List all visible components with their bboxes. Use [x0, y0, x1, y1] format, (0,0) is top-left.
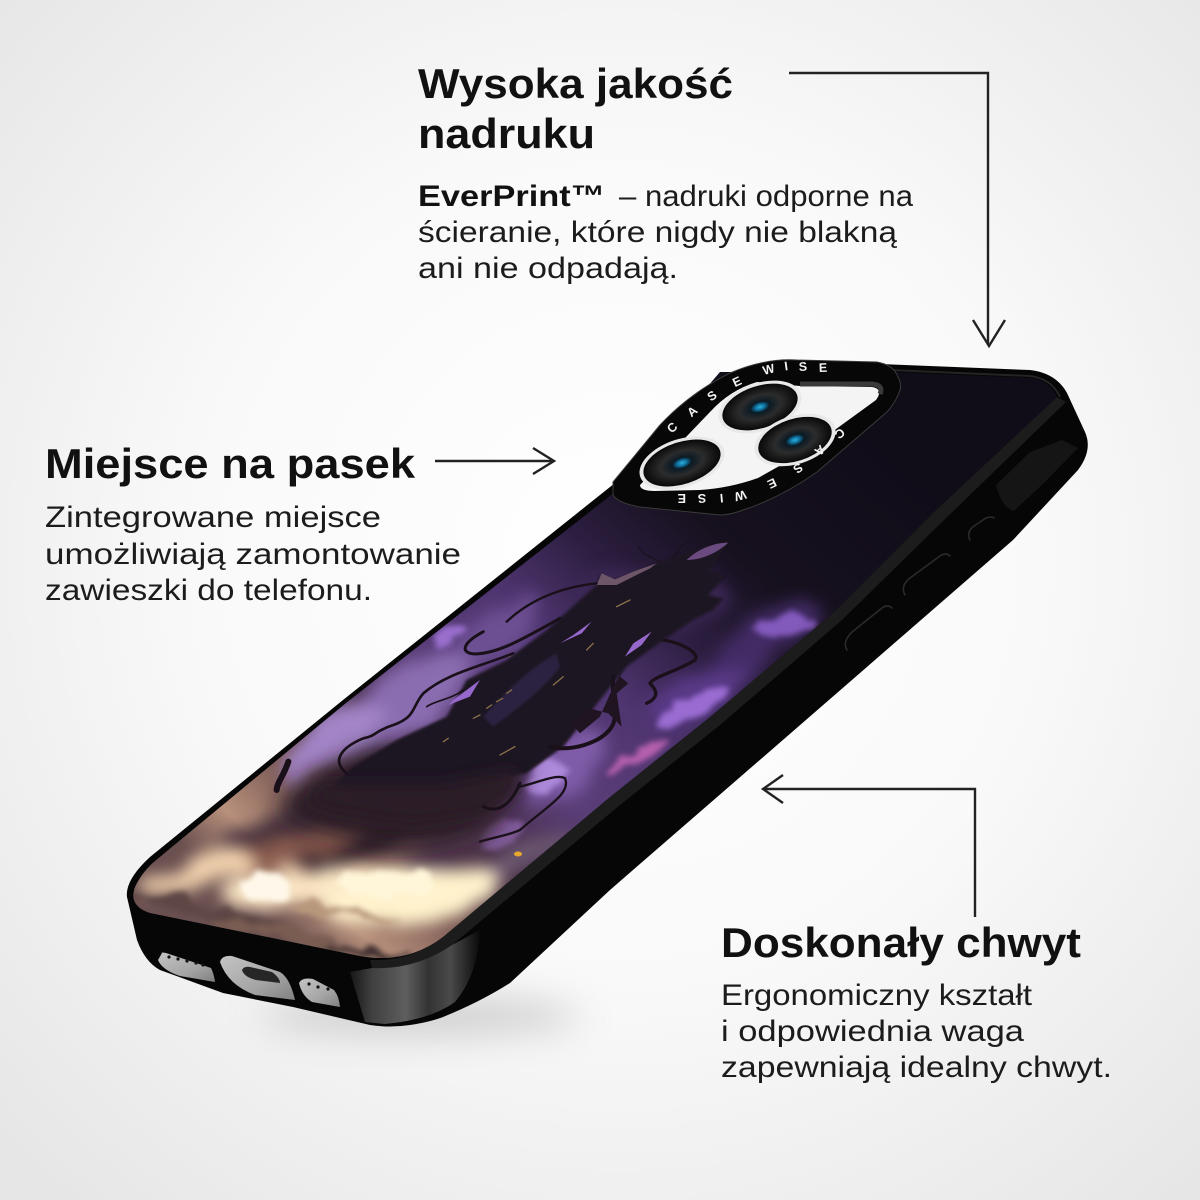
arrow: strap slot	[435, 448, 554, 474]
heading: Wysoka jakość nadruku: Wysoka jakość	[418, 60, 733, 107]
lens 2	[748, 404, 842, 476]
text: grip description: i odpowiednia waga	[721, 1015, 1024, 1048]
brand text lower: CASEWISE	[678, 425, 848, 505]
lens 3	[633, 427, 731, 499]
claw shreds	[576, 668, 628, 734]
bright cloud wisps	[430, 611, 818, 856]
text: strap description: umożliwiają zamontowanie	[45, 538, 461, 571]
cloak	[483, 653, 560, 727]
tentacles	[277, 542, 696, 842]
island frame	[613, 360, 901, 515]
artwork on the back	[133, 372, 1057, 958]
strap slot on side	[996, 440, 1078, 511]
lens 1	[712, 371, 808, 443]
smoky lower body	[277, 747, 527, 847]
smoke veil over body base	[337, 774, 530, 805]
text: EverPrint description: – nadruki odporne na	[619, 180, 913, 213]
creature body	[338, 552, 724, 784]
right speaker grille	[299, 978, 340, 1007]
heading: Wysoka jakość nadruku: nadruku	[418, 110, 595, 157]
spark	[514, 852, 522, 856]
purple clouds	[272, 570, 826, 823]
head highlight	[687, 543, 728, 560]
gold glints	[443, 600, 630, 755]
text: grip description	[721, 979, 1112, 1084]
arrow: print quality to case back	[789, 73, 1005, 346]
smoke and glow at the base	[134, 762, 568, 936]
heading: Doskonały chwyt: Doskonały chwyt	[721, 919, 1081, 966]
text: EverPrint description: ścieranie, które nigdy nie blakną	[418, 216, 897, 249]
phone case	[100, 340, 1100, 1026]
case body silhouette	[127, 364, 1088, 1026]
camera plate	[640, 382, 879, 491]
text: grip description: Ergonomiczny kształt	[721, 979, 1033, 1012]
camera island	[613, 359, 901, 515]
heading: Miejsce na pasek: Miejsce na pasek	[45, 440, 416, 487]
text: EverPrint description: ani nie odpadają.	[418, 252, 678, 285]
side buttons	[845, 517, 994, 650]
text: grip description: zapewniają idealny chwyt.	[721, 1051, 1112, 1084]
brand text upper: CASEWISE	[664, 359, 827, 436]
side face sheen	[370, 397, 1066, 968]
crest	[597, 563, 657, 585]
text: strap description: zawieszki do telefonu.	[45, 574, 372, 607]
heading block: grip	[721, 919, 1112, 1084]
heading: Wysoka jakość nadruku	[418, 60, 733, 157]
heading block: print quality	[418, 60, 913, 285]
charging port	[220, 956, 295, 1000]
glossy bottom corner	[350, 930, 480, 1024]
inner window shading	[800, 384, 881, 394]
text: strap description: Zintegrowane miejsce	[45, 501, 381, 534]
top bevel highlight	[890, 370, 1060, 397]
art base gradient	[133, 372, 1057, 958]
cloud bands along the bottom	[126, 870, 433, 964]
creature	[277, 542, 728, 847]
text: EverPrint description	[418, 180, 913, 285]
arrow: grip	[763, 775, 975, 917]
left speaker grille	[158, 952, 215, 982]
text: EverPrint description: EverPrint™	[418, 180, 605, 213]
text: strap description	[45, 501, 461, 607]
heading block: strap slot	[45, 440, 461, 607]
light slits	[448, 622, 652, 705]
drop shadow under phone	[260, 996, 580, 1036]
